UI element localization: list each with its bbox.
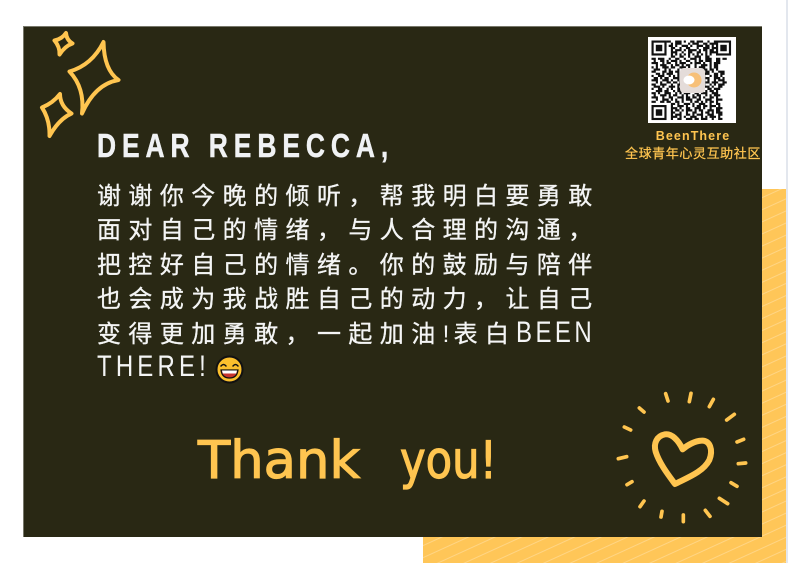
body text: 谢谢你今晚的倾听，帮我明白要勇敢 xyxy=(97,183,600,210)
body text: 变得更加勇敢，一起加油!表白 xyxy=(97,321,516,348)
icon: heart with rays xyxy=(616,392,748,524)
icon: grinning emoji xyxy=(216,356,244,384)
caption: community name: 全球青年心灵互助社区 xyxy=(625,146,761,161)
body text: 把控好自己的情绪。你的鼓励与陪伴 xyxy=(97,252,600,279)
thank you lettering xyxy=(197,431,497,491)
panel: striped yellow backing block xyxy=(423,189,786,563)
caption: community name xyxy=(625,129,761,161)
body text: 面对自己的情绪，与人合理的沟通， xyxy=(97,217,600,244)
thank you lettering: Thank xyxy=(197,431,360,491)
icon: QR code xyxy=(648,37,736,123)
heading: DEAR REBECCA, xyxy=(97,128,388,165)
icon: sparkles xyxy=(40,30,121,138)
body text: THERE! xyxy=(97,350,210,383)
right edge strip xyxy=(786,0,788,563)
body text: 也会成为我战胜自己的动力，让自己 xyxy=(97,286,600,313)
body text: BEEN xyxy=(516,316,596,349)
caption: community name: BeenThere xyxy=(656,129,730,143)
